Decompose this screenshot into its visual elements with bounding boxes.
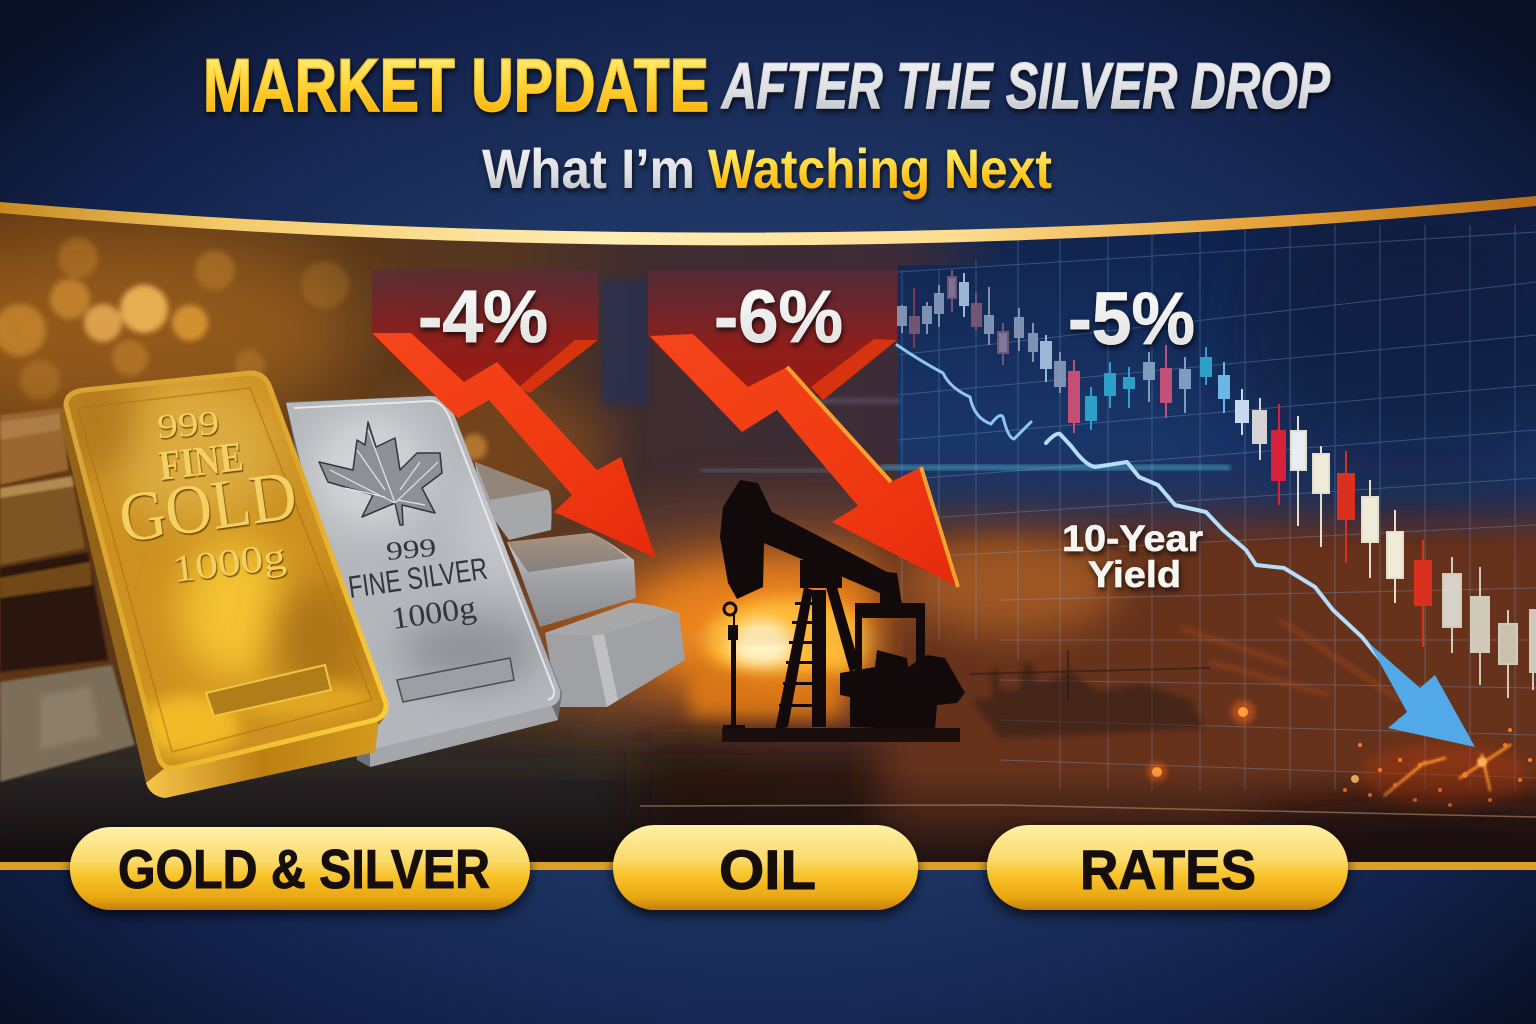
- back gold bar stack: [0, 408, 135, 782]
- oil pumpjack silhouette: [720, 480, 965, 742]
- silver bar panel: [397, 658, 514, 702]
- horizon rule: [640, 805, 1536, 817]
- cream candles: [1291, 416, 1403, 603]
- pill: gold and silver: [70, 827, 530, 910]
- value: -4%: -4%: [418, 275, 548, 358]
- value: -6%: -6%: [714, 275, 843, 358]
- photo band: [0, 180, 1536, 900]
- silver bar: [280, 390, 570, 767]
- blue arrowhead: [1369, 643, 1475, 747]
- silver bar text: 1000g: [389, 589, 478, 636]
- value: -5%: -5%: [1068, 277, 1195, 360]
- silver stacked blocks: [475, 462, 685, 707]
- rates panel background: [700, 180, 1536, 900]
- pill: oil: OIL: [719, 838, 816, 901]
- silver bar text: FINE SILVER: [346, 551, 490, 605]
- title silver part: AFTER THE SILVER DROP: [721, 49, 1330, 122]
- lower right candles: [1443, 557, 1536, 698]
- subtitle gold part: Watching Next: [708, 137, 1052, 200]
- silver block middle: [507, 533, 636, 627]
- horizon skyline: [970, 620, 1400, 738]
- silver block top: [475, 462, 552, 540]
- floor: [0, 702, 664, 862]
- gold baseline rule: [0, 862, 1536, 870]
- gold bar text: [115, 405, 301, 591]
- faded upper candles: [898, 270, 1065, 393]
- pill: oil: [613, 825, 918, 910]
- panel: red banner -6%: [648, 270, 897, 432]
- chart grid: [898, 225, 1536, 790]
- orange sparks: [1147, 700, 1532, 807]
- 10-year yield line: [897, 345, 1383, 663]
- red arrow gold and silver: [372, 333, 656, 558]
- title gold part: MARKET UPDATE: [203, 43, 709, 127]
- grey candle: [1253, 398, 1266, 460]
- pill: gold and silver: GOLD & SILVER: [118, 838, 490, 900]
- panel: red banner -4%: [372, 270, 598, 418]
- gold bar text: 999: [156, 405, 220, 446]
- gold bar text: 1000g: [170, 535, 288, 591]
- blue-grey candles: [1144, 352, 1190, 413]
- pill: rates: [987, 825, 1348, 910]
- gold bar text: FINE: [157, 434, 246, 490]
- gold bar: [55, 360, 395, 798]
- title: [203, 43, 1330, 127]
- ground below pumpjack: [624, 710, 894, 825]
- silver bar text: [346, 533, 490, 636]
- gold bar text: GOLD: [115, 457, 301, 558]
- lower shading: [0, 770, 1536, 866]
- label: 10-Year Yield: 10-Year: [1062, 518, 1203, 559]
- red candles: [1272, 404, 1285, 505]
- silver bar text: 999: [385, 533, 437, 566]
- gold bar panel: [206, 665, 331, 716]
- pink candles: [1069, 345, 1171, 433]
- subtitle white part: What I’m: [482, 137, 695, 200]
- gold curve divider: [0, 196, 1536, 245]
- icon: maple leaf: [319, 422, 442, 525]
- pill: rates: RATES: [1080, 838, 1256, 901]
- label: 10-Year Yield: Yield: [1088, 554, 1181, 595]
- subtitle: [482, 137, 1052, 200]
- candlestick chart: [898, 270, 1536, 698]
- red arrow oil: [650, 334, 958, 587]
- sunset glow: [508, 478, 910, 763]
- warm haze and bokeh lights: [0, 230, 648, 520]
- silver block bottom: [545, 603, 685, 707]
- light blue candles: [1219, 362, 1229, 413]
- teal candles: [1086, 347, 1211, 430]
